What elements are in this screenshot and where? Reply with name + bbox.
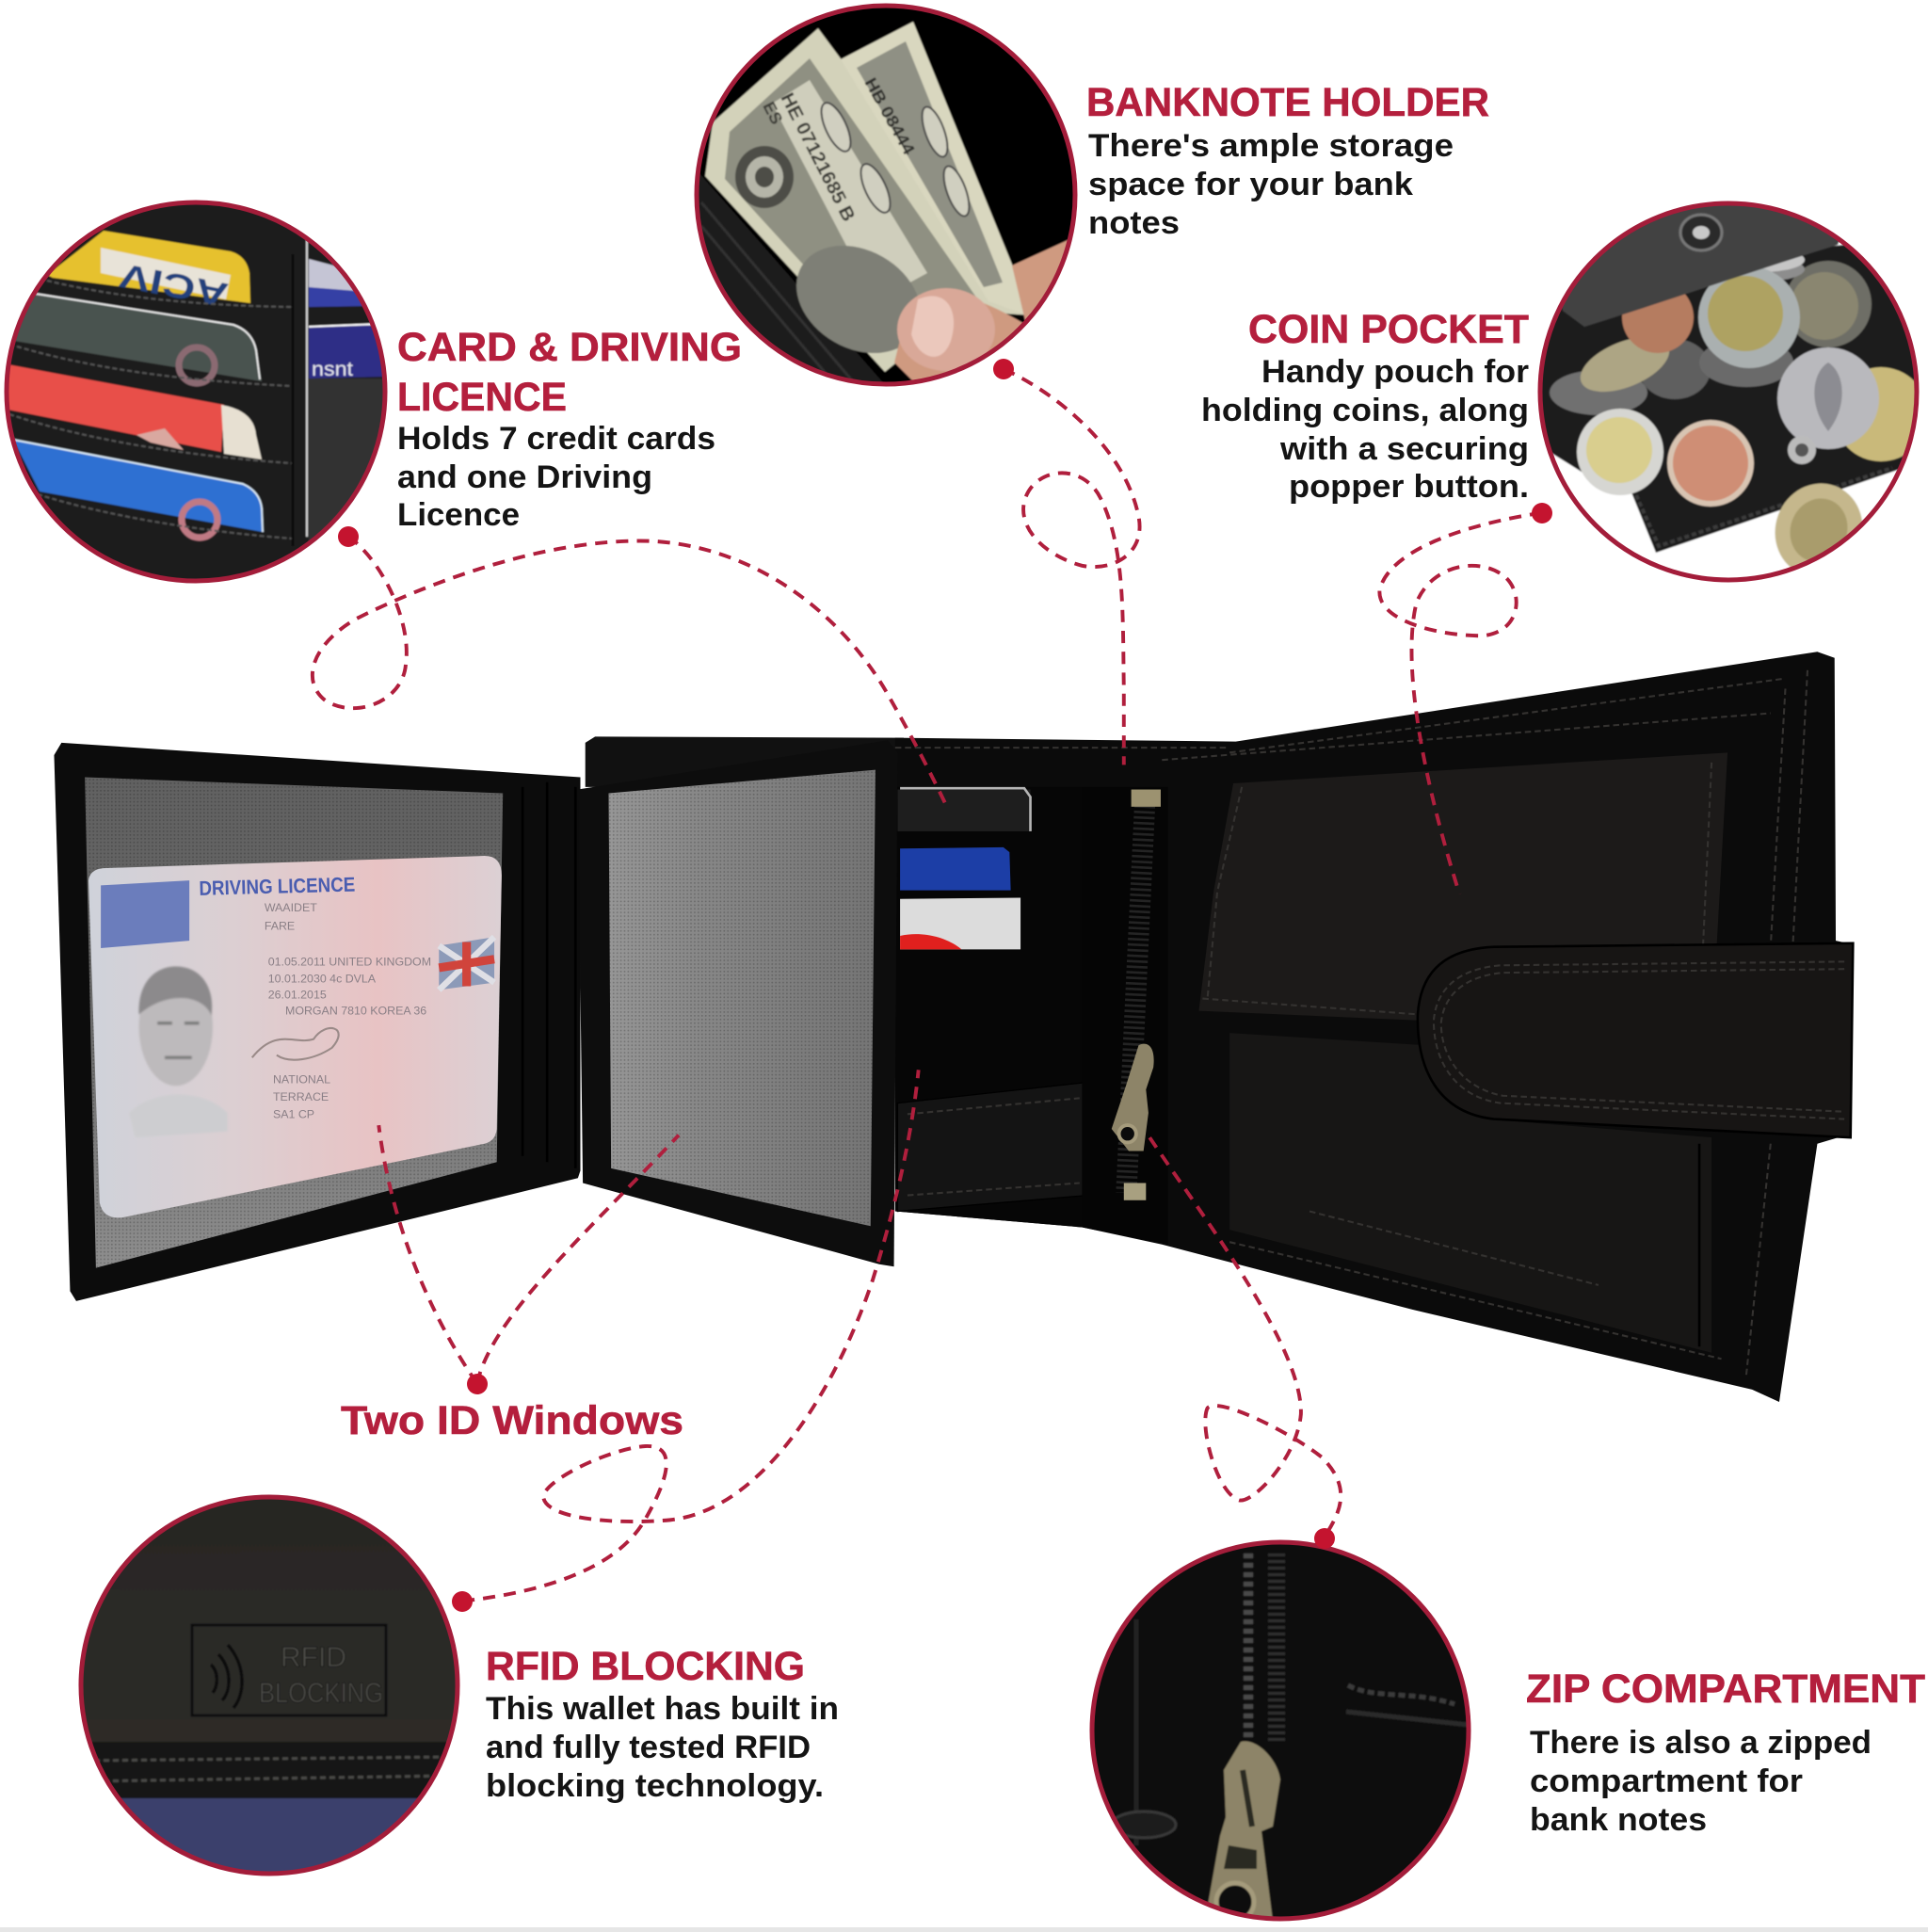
flap bbox=[1562, 205, 1840, 328]
popper stud bbox=[1680, 215, 1722, 250]
red stripe on card bbox=[900, 934, 961, 949]
front banknote bbox=[705, 28, 1032, 375]
rfid embossed badge: BLOCKING bbox=[259, 1678, 383, 1709]
coin pocket flap bbox=[1198, 752, 1727, 1021]
heading and text: banknote holder: There's ample storage bbox=[1088, 128, 1454, 164]
wallet right body bbox=[895, 652, 1853, 1402]
bimetal coin lower bbox=[1577, 409, 1663, 495]
connector dot: card bbox=[338, 526, 359, 547]
signature bbox=[252, 1028, 339, 1060]
heading and text: zip compartment: bank notes bbox=[1530, 1802, 1707, 1838]
closure strap bbox=[1418, 943, 1853, 1137]
licence fields bbox=[265, 901, 431, 1120]
zip pull bbox=[1112, 1044, 1154, 1151]
heading and text: card and driving licence: Holds 7 credit cards bbox=[397, 421, 715, 457]
left mesh window bbox=[85, 777, 503, 1268]
panel: coin pocket photo bbox=[1534, 188, 1928, 589]
heading and text: coin pocket: COIN POCKET bbox=[1248, 307, 1529, 352]
silver coin stack bbox=[1762, 254, 1806, 281]
mesh card slot bbox=[897, 788, 1031, 831]
connector: coin pocket bbox=[1379, 513, 1542, 894]
connector: rfid blocking bbox=[462, 1070, 919, 1602]
heading and text: banknote holder: space for your bank bbox=[1088, 167, 1413, 202]
treasury seal bbox=[735, 146, 794, 208]
middle mesh window bbox=[609, 770, 876, 1226]
rear banknote bbox=[840, 21, 1020, 301]
yellow card bbox=[47, 231, 250, 314]
side slot cards: nsnt bbox=[312, 359, 353, 380]
heading and text: coin pocket: with a securing bbox=[1279, 431, 1529, 467]
driving licence card bbox=[88, 856, 502, 1217]
connector: zip compartment bbox=[1149, 1137, 1341, 1538]
zipper top stop bbox=[1132, 790, 1161, 807]
grey card bbox=[14, 294, 262, 383]
blue card strip bbox=[75, 1798, 466, 1883]
wallet edge bbox=[699, 173, 883, 382]
zip pull bbox=[1205, 1741, 1280, 1921]
heading and text: rfid blocking: blocking technology. bbox=[486, 1768, 824, 1804]
rear banknote: HB 08444 bbox=[861, 74, 919, 158]
big silver coin bbox=[1777, 347, 1879, 449]
heading and text: banknote holder: notes bbox=[1088, 205, 1180, 241]
connector dot: id windows bbox=[467, 1374, 488, 1394]
portrait bbox=[795, 245, 917, 354]
hinge folds bbox=[522, 782, 575, 1168]
press stud base bbox=[1788, 436, 1816, 464]
card slots panel bbox=[895, 787, 1088, 1228]
hand and thumb bbox=[894, 239, 1068, 380]
heading and text: rfid blocking: This wallet has built in bbox=[486, 1691, 839, 1727]
heading and text: banknote holder bbox=[1086, 80, 1489, 241]
uk flag bbox=[439, 937, 494, 990]
grey lower coins bbox=[1550, 370, 1647, 415]
red card bbox=[8, 364, 262, 459]
connector dot: rfid bbox=[452, 1591, 473, 1612]
loose gold coin bbox=[1762, 471, 1875, 589]
panel: banknote holder photo bbox=[692, 0, 1083, 395]
side slot cards bbox=[308, 258, 382, 540]
heading and text: zip compartment bbox=[1526, 1666, 1925, 1838]
licence fields: MORGAN 7810 KOREA 36 bbox=[285, 1005, 426, 1018]
licence fields: 26.01.2015 bbox=[268, 989, 327, 1002]
licence fields: TERRACE bbox=[273, 1090, 329, 1103]
connector dot: coin bbox=[1532, 503, 1552, 523]
stitched leather band bbox=[75, 1742, 466, 1798]
yellow card: ACIV bbox=[117, 256, 232, 314]
connector dot: zip bbox=[1314, 1528, 1335, 1549]
wallet interior bbox=[1534, 235, 1920, 553]
connector: two id windows right bbox=[477, 1135, 679, 1383]
bimetal coin top bbox=[1698, 266, 1800, 368]
back coin bbox=[1785, 261, 1872, 347]
white card bbox=[900, 897, 1020, 949]
heading and text: card and driving licence bbox=[397, 325, 742, 533]
panel: zip compartment photo bbox=[1087, 1537, 1473, 1924]
rfid embossed badge: RFID bbox=[281, 1642, 346, 1673]
left window flap bbox=[54, 743, 580, 1301]
heading and text: card and driving licence: CARD & DRIVING bbox=[397, 325, 742, 370]
licence fields: SA1 CP bbox=[273, 1107, 314, 1120]
rfid embossed badge bbox=[192, 1625, 386, 1715]
copper coin top bbox=[1621, 294, 1695, 354]
blue card bbox=[13, 440, 263, 538]
side stud bbox=[1112, 1811, 1176, 1838]
gold coin right bbox=[1845, 365, 1915, 463]
eu flag bbox=[101, 880, 189, 948]
label: two id windows: Two ID Windows bbox=[341, 1398, 683, 1443]
zipper teeth bbox=[1248, 1554, 1277, 1742]
blue card bbox=[900, 847, 1011, 891]
panel: card and driving licence photo bbox=[0, 198, 395, 593]
wallet photo bbox=[54, 369, 1853, 1602]
inner strap tab bbox=[897, 1082, 1088, 1212]
heading and text: zip compartment: ZIP COMPARTMENT bbox=[1526, 1666, 1925, 1712]
heading and text: zip compartment: compartment for bbox=[1530, 1763, 1803, 1799]
front banknote: ES bbox=[759, 99, 786, 127]
zipper bottom stop bbox=[1124, 1183, 1146, 1200]
lower pocket panel bbox=[1229, 1033, 1711, 1353]
heading and text: zip compartment: There is also a zipped bbox=[1530, 1725, 1872, 1761]
licence fields: NATIONAL bbox=[273, 1073, 330, 1087]
vertical seam thread bbox=[292, 254, 294, 546]
licence fields: 01.05.2011 UNITED KINGDOM bbox=[268, 955, 431, 968]
heading and text: coin pocket: popper button. bbox=[1289, 469, 1529, 505]
heading and text: card and driving licence: Licence bbox=[397, 497, 520, 533]
heading and text: coin pocket bbox=[1201, 307, 1529, 505]
licence photo face bbox=[129, 967, 228, 1137]
heading and text: card and driving licence: and one Driving bbox=[397, 459, 652, 495]
connector: card and driving licence bbox=[313, 536, 948, 809]
heading and text: card and driving licence: LICENCE bbox=[397, 375, 567, 420]
heading and text: coin pocket: Handy pouch for bbox=[1261, 354, 1529, 390]
stitching and seam bbox=[1346, 1685, 1469, 1725]
zipper bbox=[1082, 787, 1168, 1245]
wave icon bbox=[211, 1645, 242, 1708]
licence fields: 10.01.2030 4c DVLA bbox=[268, 973, 377, 986]
connector: two id windows left bbox=[378, 1125, 477, 1383]
back of wallet behind the flap bbox=[586, 736, 904, 787]
heading and text: rfid blocking: RFID BLOCKING bbox=[486, 1644, 805, 1689]
licence title: DRIVING LICENCE bbox=[199, 873, 356, 900]
card slot stitching bbox=[9, 281, 292, 539]
left gold coin bbox=[1580, 339, 1670, 393]
serial number: HE 07121685 B bbox=[777, 89, 859, 225]
licence fields: WAAIDET bbox=[265, 901, 317, 914]
heading and text: banknote holder: BANKNOTE HOLDER bbox=[1086, 80, 1489, 125]
middle window flap bbox=[578, 740, 897, 1266]
licence fields: FARE bbox=[265, 919, 295, 932]
connector: banknote holder bbox=[1004, 369, 1140, 765]
copper coin lower bbox=[1667, 420, 1754, 507]
panel: rfid blocking photo bbox=[75, 1492, 466, 1883]
heading and text: rfid blocking bbox=[486, 1644, 839, 1804]
connector dot: banknote bbox=[993, 359, 1014, 379]
heading and text: coin pocket: holding coins, along bbox=[1201, 393, 1529, 428]
heading and text: rfid blocking: and fully tested RFID bbox=[486, 1730, 811, 1765]
